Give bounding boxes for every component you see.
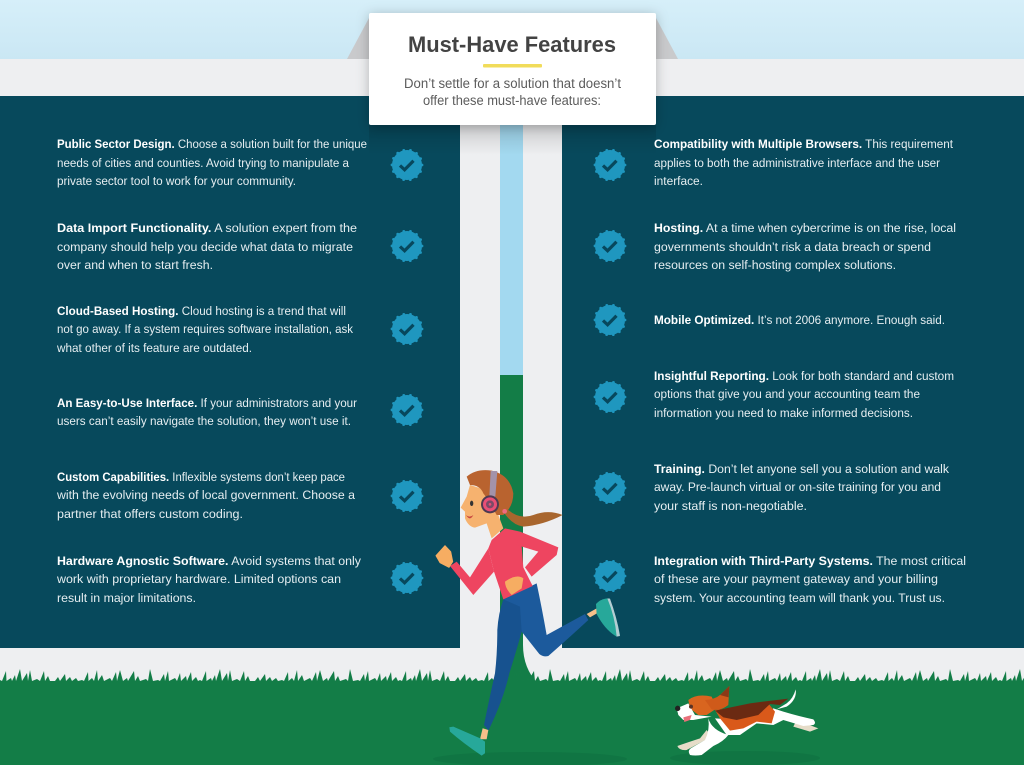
feature: public sector design: Public Sector Design. Choose a solution built for the unique xyxy=(57,137,367,151)
feature: data import: company should help you decide what data to migrate xyxy=(57,240,353,254)
feature: cloud hosting xyxy=(56,304,354,355)
ground shadows xyxy=(433,751,820,765)
feature: cloud hosting: what other of its feature are outdated. xyxy=(56,341,252,355)
feature: custom capabilities xyxy=(56,470,355,521)
feature: training xyxy=(654,462,950,513)
feature: hardware agnostic xyxy=(56,554,362,605)
feature: data import: Data Import Functionality. A solution expert from the xyxy=(57,221,357,235)
feature: third-party integration: system. Your accounting team will thank you. Trust us. xyxy=(654,591,945,605)
feature: custom capabilities: Custom Capabilities. Inflexible systems don’t keep pace xyxy=(57,470,345,484)
feature: public sector design: needs of cities and counties. Avoid trying to manipulate a xyxy=(57,156,349,170)
lawn xyxy=(0,681,1024,765)
yellow underline xyxy=(483,64,542,68)
feature: third-party integration: of these are your payment gateway and your billing xyxy=(654,572,938,586)
feature: training: Training. Don’t let anyone sell you a solution and walk xyxy=(654,462,950,476)
lower wall band xyxy=(0,648,1024,688)
subtitle: Don’t settle for a solution that doesn’t xyxy=(404,76,621,91)
feature: browser compatibility xyxy=(654,137,954,188)
feature: insightful reporting: Insightful Reporting. Look for both standard and custom xyxy=(654,369,954,383)
feature: hardware agnostic: Hardware Agnostic Software. Avoid systems that only xyxy=(57,554,362,568)
feature: easy interface: An Easy-to-Use Interface. If your administrators and your xyxy=(57,396,357,410)
right teal panel xyxy=(562,96,1024,648)
feature: cloud hosting: Cloud-Based Hosting. Cloud hosting is a trend that will xyxy=(57,304,346,318)
feature: mobile optimized: Mobile Optimized. It’s not 2006 anymore. Enough said. xyxy=(654,313,945,327)
title: Must-Have Features xyxy=(408,32,616,57)
feature: hardware agnostic: work with proprietary hardware. Limited options can xyxy=(56,572,341,586)
feature: insightful reporting xyxy=(654,369,954,420)
feature: data import xyxy=(57,221,357,272)
central path strip xyxy=(460,96,562,684)
left column features xyxy=(56,137,367,605)
feature: browser compatibility: applies to both the administrative interface and the user xyxy=(654,156,940,170)
feature: training: your staff is non-negotiable. xyxy=(654,499,807,513)
subtitle xyxy=(404,76,621,108)
card shadow below xyxy=(369,125,656,155)
feature: insightful reporting: information you need to make informed decisions. xyxy=(654,406,913,420)
feature: hosting: resources on self-hosting complex solutions. xyxy=(654,258,896,272)
feature: hosting: governments shouldn’t risk a data breach or spend xyxy=(654,240,931,254)
feature: custom capabilities: with the evolving needs of local government. Choose a xyxy=(56,488,355,502)
feature: hosting: Hosting. At a time when cybercrime is on the rise, local xyxy=(654,221,956,235)
feature: hosting xyxy=(654,221,956,272)
feature: third-party integration xyxy=(654,554,966,605)
feature: easy interface: users can’t easily navigate the solution, they won’t use it. xyxy=(57,414,351,428)
left teal panel xyxy=(0,96,460,648)
feature: data import: over and when to start fresh. xyxy=(57,258,213,272)
feature: browser compatibility: interface. xyxy=(654,174,703,188)
feature: cloud hosting: not go away. If a system requires software installation, ask xyxy=(57,322,354,336)
feature: easy interface xyxy=(57,396,357,428)
icons: left check badges xyxy=(392,150,422,593)
sky background xyxy=(0,0,1024,60)
feature: public sector design xyxy=(57,137,367,188)
roof right xyxy=(656,18,678,59)
grass xyxy=(0,668,1024,684)
feature: public sector design: private sector tool to work for your community. xyxy=(57,174,296,188)
feature: third-party integration: Integration with Third-Party Systems. The most critical xyxy=(654,554,966,568)
icons: right check badges xyxy=(595,150,625,591)
right column features xyxy=(654,137,966,605)
feature: browser compatibility: Compatibility with Multiple Browsers. This requirement xyxy=(654,137,954,151)
feature: insightful reporting: options that give you and your accounting team the xyxy=(654,387,920,401)
title card xyxy=(369,13,656,125)
feature: hardware agnostic: result in major limitations. xyxy=(57,591,196,605)
runner illustration xyxy=(436,470,620,756)
feature: training: away. Pre-launch virtual or on-site training for you and xyxy=(654,480,941,494)
roof left xyxy=(347,18,369,59)
subtitle: offer these must-have features: xyxy=(423,93,601,108)
feature: custom capabilities: partner that offers custom coding. xyxy=(57,507,243,521)
dog illustration xyxy=(675,686,818,755)
upper wall band xyxy=(0,59,1024,96)
